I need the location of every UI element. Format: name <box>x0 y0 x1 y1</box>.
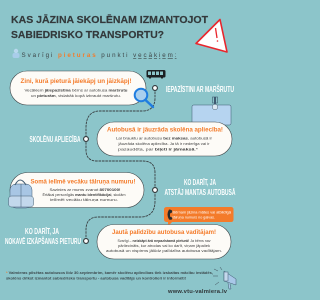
website link: www.vtu-valmiera.lv <box>167 289 228 295</box>
panel: ask driver card: Jautā palīdzību autobusa vadītājam! <box>112 229 216 236</box>
panel: student id card text: jāuzrāda skolēna apliecība. Ja tā ir nederīga vai ir <box>117 142 210 146</box>
callout: orange phone note: tālruņa numurs no galvas. <box>172 216 215 220</box>
icon: backpack <box>8 180 34 208</box>
panel: ask driver card: autobusā un vispirms jālūdz palīdzība autobusa vadītājam. <box>106 249 222 253</box>
panel: ask driver card <box>97 224 231 259</box>
panel: phone number card: ielīmēt vecāku tālruņa numuru. <box>50 198 118 202</box>
label: ko darīt, ja atstāj mantas autobusā <box>164 178 236 197</box>
icon: bus <box>146 70 166 79</box>
panel: phone number card <box>10 172 144 208</box>
icon: warning triangle <box>196 20 227 52</box>
marker: route stop 3 <box>153 188 157 192</box>
icon: megaphone <box>213 267 236 289</box>
label: ko darīt, ja atstāj mantas autobusā: KO DARĪT, JA <box>184 178 216 187</box>
panel: phone number card: Sazinies ar mums zvanot 80700100! <box>50 188 120 192</box>
label: ko darīt, ja nokavē izkāpšanas pieturu: KO DARĪT, JA <box>25 227 59 236</box>
footnote <box>6 271 213 280</box>
icon: student id card <box>192 97 231 125</box>
label: ko darīt, ja nokavē izkāpšanas pieturu <box>5 227 81 246</box>
marker: route stop 1 <box>153 86 157 90</box>
marker: route stop 4 <box>84 239 88 243</box>
panel: student id card text <box>97 122 232 156</box>
panel: ask driver card: pārliecināts, kur atrodas vai ko darīt, viņam jāpaliek <box>118 244 210 248</box>
icon: magnifying glass <box>135 89 153 107</box>
subtitle <box>12 49 177 59</box>
callout: orange phone note: Bērnam jāzina mātes vai atbildīgā <box>172 210 231 214</box>
marker: route stop 2 <box>84 137 88 141</box>
panel: route card: Vecākiem jāiepazīstina bērns ar autobusa maršrutu <box>24 88 128 92</box>
panel: ask driver card: Svarīgi – neizkāpt ārā nepazīstamā pieturā! Ja bērns nav <box>118 239 211 243</box>
title: KAS JĀZINA SKOLĒNAM IZMANTOJOT <box>11 14 209 26</box>
label: ko darīt, ja nokavē izkāpšanas pieturu: NOKAVĒ IZKĀPŠANAS PIETURU <box>5 237 81 246</box>
callout: orange phone note <box>164 207 234 226</box>
label: skolēnu apliecība: SKOLĒNU APLIECĪBA <box>30 135 81 144</box>
panel: phone number card: Ērtākai personīgās mantu identifikācijai, skolām <box>42 193 126 197</box>
footnote: skolēns drīkst izmantot sabiedrisko transportu - autobusa vadītājs un kontrolieri ir informēti! <box>6 276 186 280</box>
title <box>11 14 209 41</box>
subtitle: Svarīgi pieturas punkti vecākiem: <box>22 52 177 59</box>
icon: bus stop figure <box>12 49 20 58</box>
background <box>0 0 240 300</box>
panel: route card: un pieturām , vislabāk kopā izbraukt maršrutu. <box>31 94 121 98</box>
route line <box>86 88 155 241</box>
panel: route card <box>10 71 146 105</box>
panel: student id card text: pazaudēta, par biļeti ir jāmaksā .* <box>118 148 199 152</box>
footnote: * Valmieras pilsētas autobusos līdz 30.septembrim, kamēr skolēnu apliecības tiek izskaitas mācību iestādēs, <box>6 271 213 275</box>
panel: phone number card: Somā ielīmē vecāku tālruņa numuru! <box>30 178 136 186</box>
panel: student id card text: Lai brauktu ar autobusu bez maksas , autobusā ir <box>116 136 213 140</box>
title: SABIEDRISKO TRANSPORTU? <box>11 30 164 41</box>
panel: route card: Zini, kurā pieturā jāiekāpj un jāizkāpj! <box>20 78 132 85</box>
panel: student id card text: Autobusā ir jāuzrāda skolēna apliecība! <box>107 126 223 134</box>
